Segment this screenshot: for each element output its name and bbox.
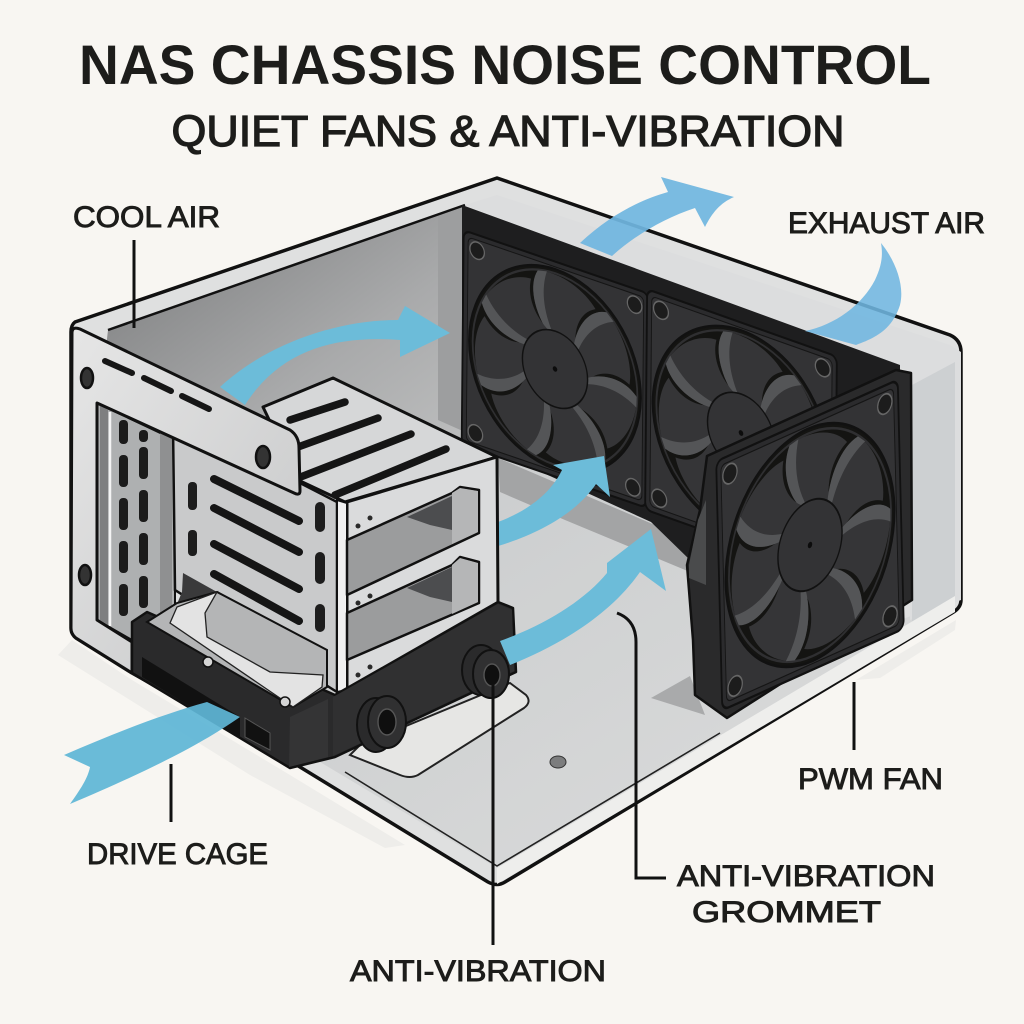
tray silhouette xyxy=(132,602,516,768)
tray right face xyxy=(333,604,514,756)
arrow: airflow lower xyxy=(500,529,666,665)
inner wall edge xyxy=(108,205,465,330)
outer lip line xyxy=(345,733,720,866)
fan 2 xyxy=(645,289,837,577)
subtitle: QUIET FANS & ANTI-VIBRATION xyxy=(172,107,844,156)
floor shadow beside fans xyxy=(498,458,690,572)
floor pad xyxy=(350,683,529,777)
cage front xyxy=(347,457,498,690)
front lip xyxy=(497,596,955,884)
label: anti-vibration grommet: ANTI-VIBRATION xyxy=(677,860,935,893)
plate slots xyxy=(105,361,209,409)
chassis shell xyxy=(71,178,961,884)
drive cage xyxy=(173,378,498,692)
cage left side xyxy=(173,425,337,692)
arrow: airflow middle xyxy=(498,456,610,546)
cage top slots xyxy=(290,402,446,495)
anti-vibration grommet: right xyxy=(462,645,509,698)
tray connector openings xyxy=(142,657,240,737)
floor mounting hole xyxy=(550,756,566,768)
title: NAS CHASSIS NOISE CONTROL xyxy=(79,33,931,96)
cage bay openings xyxy=(347,487,479,595)
fan 3 housing xyxy=(687,370,912,718)
tray corner xyxy=(289,699,328,767)
ground shadows xyxy=(58,620,956,848)
arrow: cool air into drive xyxy=(64,702,240,804)
label: drive cage: DRIVE CAGE xyxy=(87,838,268,871)
rear slotted panel xyxy=(97,403,175,640)
arrow: cool air upper xyxy=(220,306,450,405)
fan 3 housing highlight xyxy=(689,500,706,585)
drive screws xyxy=(203,657,213,667)
rear wall lip xyxy=(465,195,961,620)
label: exhaust air: EXHAUST AIR xyxy=(788,207,985,240)
fan bank backing xyxy=(462,205,900,610)
anti-vibration grommet: left xyxy=(357,696,406,752)
hard drive top xyxy=(147,592,327,707)
cage top xyxy=(263,378,497,502)
fan 3 xyxy=(716,380,904,710)
arrow: exhaust air top xyxy=(580,177,734,256)
drive tray and hard drive xyxy=(132,592,516,768)
fan 1 xyxy=(462,230,648,508)
label: pwm fan: PWM FAN xyxy=(798,763,943,796)
label: cool air: COOL AIR xyxy=(73,201,220,234)
label: anti-vibration grommet: GROMMET xyxy=(692,896,881,929)
right side panel xyxy=(912,362,955,622)
floor xyxy=(300,450,955,868)
front plate xyxy=(71,328,300,673)
fan shadow on floor xyxy=(651,676,705,715)
interior back wall xyxy=(100,205,500,500)
cage lower side opening xyxy=(177,573,217,604)
plate holes xyxy=(79,368,270,585)
wall side strip xyxy=(438,205,465,432)
cage side slots xyxy=(214,479,299,621)
arrow: exhaust air right xyxy=(805,243,901,345)
label: anti-vibration: ANTI-VIBRATION xyxy=(350,955,606,988)
label: anti-vibration grommet xyxy=(617,613,935,929)
